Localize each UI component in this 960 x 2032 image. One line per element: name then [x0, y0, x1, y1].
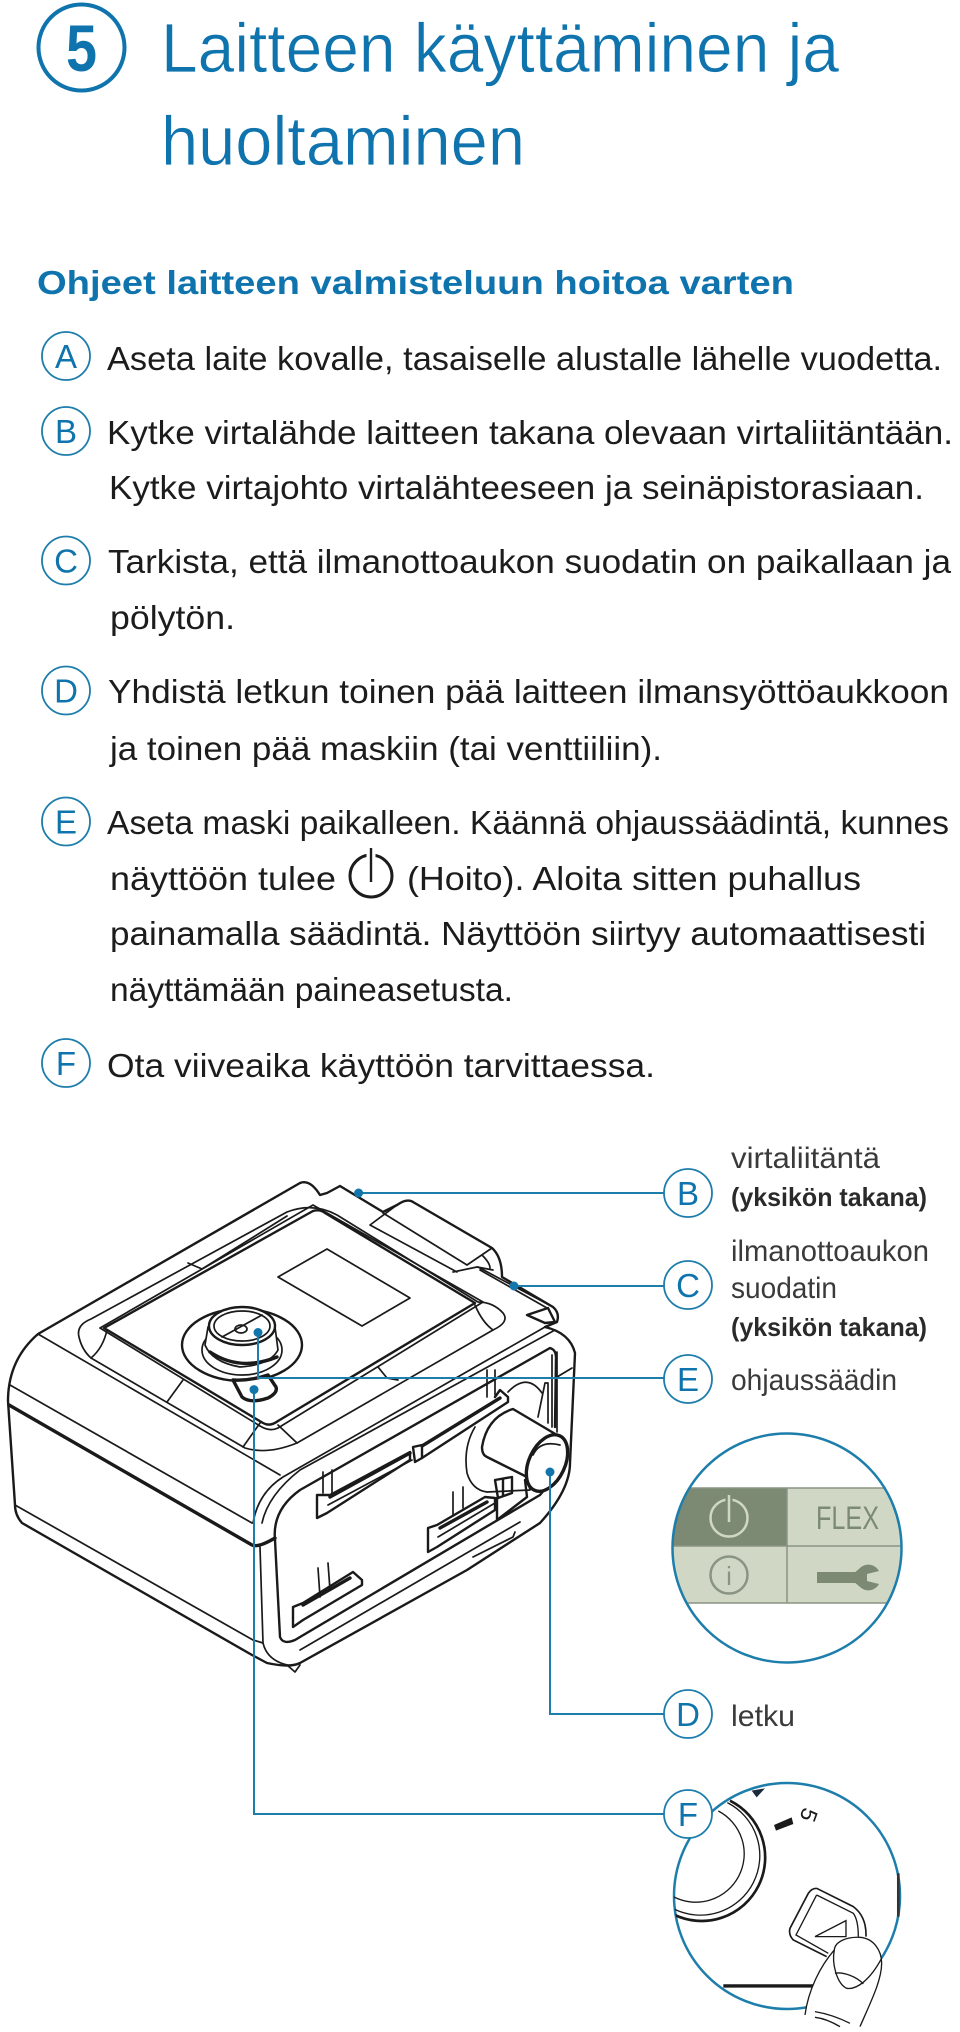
- control knob: [182, 1309, 302, 1381]
- label D: hose: D: [676, 1696, 700, 1733]
- title: huoltaminen: [161, 102, 525, 180]
- section number badge: [38, 4, 124, 90]
- icon: wrench: [817, 1565, 879, 1590]
- label B: power inlet: (yksikön takana): [731, 1182, 927, 1212]
- callout line E: [254, 1328, 664, 1378]
- label D: hose: [664, 1690, 795, 1738]
- step D: [42, 666, 949, 767]
- inset: delay button close-up: [673, 1783, 900, 2027]
- label C: air filter: C: [676, 1267, 700, 1304]
- step D: ja toinen pää maskiin (tai venttiiliin).: [109, 730, 662, 767]
- step B: Kytke virtajohto virtalähteeseen ja seinäpistorasiaan.: [109, 469, 924, 506]
- screen label: [278, 1249, 410, 1326]
- step B: B: [55, 413, 77, 450]
- label B: power inlet: B: [677, 1175, 699, 1212]
- label B: power inlet: virtaliitäntä: [731, 1142, 880, 1175]
- label C: air filter: ilmanottoaukon: [731, 1235, 929, 1268]
- recessed top area: [78, 1208, 505, 1451]
- icon: info symbol: i: [726, 1561, 732, 1591]
- step B: Kytke virtalähde laitteen takana olevaan virtaliitäntään.: [107, 414, 953, 451]
- label E: control dial: E: [677, 1361, 699, 1398]
- step D: Yhdistä letkun toinen pää laitteen ilmansyöttöaukkoon: [108, 673, 949, 710]
- step A: [42, 332, 942, 380]
- callout line D: [546, 1468, 664, 1714]
- step D: D: [54, 672, 78, 710]
- heading: preparation instructions: Ohjeet laitteen valmisteluun hoitoa varten: [37, 264, 794, 301]
- step A: Aseta laite kovalle, tasaiselle alustalle lähelle vuodetta.: [107, 340, 942, 377]
- callout line B: [354, 1188, 664, 1198]
- label D: hose: letku: [731, 1700, 795, 1733]
- label E: control dial: [664, 1355, 897, 1403]
- air outlet tube: [508, 1352, 557, 1432]
- step E: (Hoito). Aloita sitten puhallus: [407, 860, 861, 897]
- label B: power inlet: [664, 1142, 927, 1217]
- step C: C: [54, 542, 78, 580]
- top front edge and rim: [38, 1334, 280, 1475]
- title: Laitteen käyttäminen ja: [161, 9, 839, 87]
- step E: painamalla säädintä. Näyttöön siirtyy automaattisesti: [110, 915, 926, 952]
- middle slot: [428, 1497, 495, 1552]
- label E: control dial: ohjaussäädin: [731, 1364, 897, 1397]
- device illustration: [8, 1182, 576, 1672]
- icon: info symbol: [710, 1556, 748, 1594]
- step F: F: [56, 1045, 76, 1082]
- label F: delay button: F: [678, 1796, 698, 1833]
- step E: näyttöön tulee: [110, 860, 336, 897]
- lower-left slot: [293, 1572, 362, 1627]
- step E: E: [55, 804, 77, 840]
- step E: [42, 798, 949, 1008]
- title: [161, 9, 839, 180]
- section number badge: 5: [66, 11, 97, 85]
- inset: display screen: [670, 1434, 910, 1662]
- step F: Ota viiveaika käyttöön tarvittaessa.: [107, 1047, 655, 1084]
- step E: Aseta maski paikalleen. Käännä ohjaussäädintä, kunnes: [107, 804, 949, 841]
- step C: pölytön.: [110, 599, 235, 636]
- icon: power symbol: [710, 1495, 748, 1536]
- side seams: [10, 1385, 252, 1523]
- step B: [42, 407, 953, 506]
- step E: näyttämään paineasetusta.: [110, 971, 513, 1008]
- label C: air filter: (yksikön takana): [731, 1312, 927, 1342]
- callout line C: [510, 1282, 664, 1290]
- step C: [42, 536, 952, 636]
- step C: Tarkista, että ilmanottoaukon suodatin on paikallaan ja: [108, 543, 952, 580]
- step A: A: [55, 338, 77, 375]
- label F: delay button: [664, 1790, 712, 1838]
- display frame: [104, 1210, 475, 1425]
- callout line F: [250, 1385, 664, 1814]
- upper slots: [317, 1452, 410, 1518]
- inset: delay button close-up: 5: [795, 1805, 823, 1825]
- latch and connector: [370, 1205, 493, 1272]
- FLEX label: FLEX: [816, 1500, 879, 1536]
- label C: air filter: [664, 1235, 929, 1342]
- label C: air filter: suodatin: [731, 1272, 837, 1305]
- step F: [42, 1039, 655, 1087]
- control button: [233, 1375, 276, 1401]
